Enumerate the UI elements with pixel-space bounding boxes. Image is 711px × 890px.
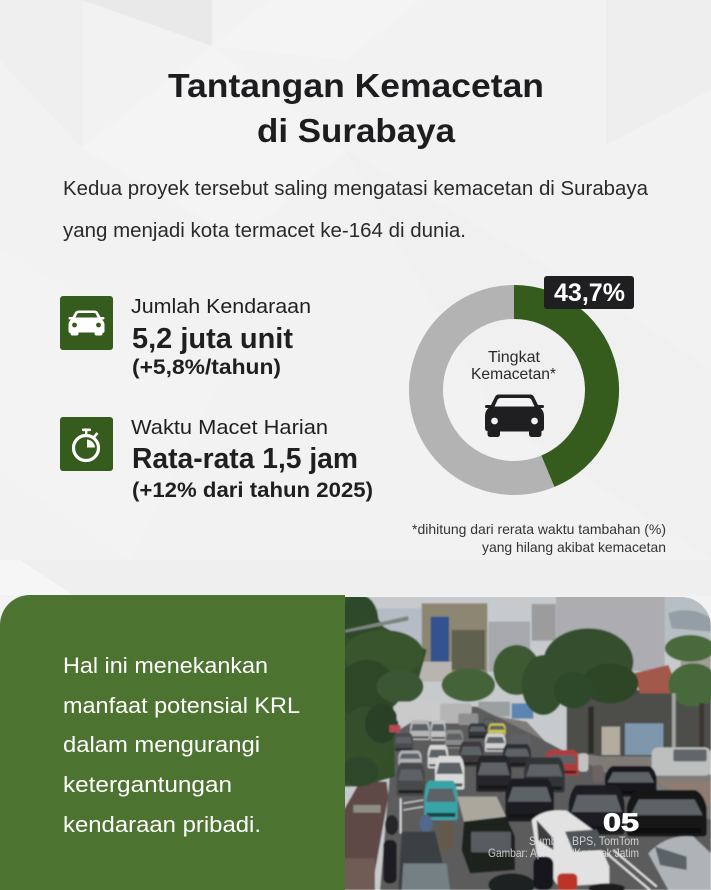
intro text: yang menjadi kota termacet ke-164 di dunia.	[63, 219, 466, 242]
motorcycles left	[385, 815, 398, 835]
icon: car on green tile	[60, 296, 113, 350]
intro text: Kedua proyek tersebut saling mengatasi kemacetan di Surabaya	[63, 177, 649, 200]
panel text: kendaraan pribadi.	[63, 812, 261, 837]
footnote: yang hilang akibat kemacetan	[482, 539, 666, 555]
distant trees	[665, 635, 711, 662]
footpath	[345, 780, 390, 871]
title	[168, 67, 544, 149]
vehicle count text: 5,2 juta unit	[132, 323, 294, 355]
title: di Surabaya	[257, 112, 456, 149]
traffic cars	[410, 720, 430, 740]
road markings	[398, 797, 403, 834]
percentage label: 43,7%	[554, 279, 625, 307]
panel: green message	[0, 595, 345, 890]
source credits: Gambar: Aprilia D./Kompak Jatim	[488, 846, 639, 860]
panel text: manfaat potensial KRL	[63, 693, 300, 718]
vehicle count text: (+5,8%/tahun)	[132, 356, 281, 379]
photo: traffic jam street in Surabaya	[337, 590, 711, 890]
donut centre label: Tingkat	[488, 349, 541, 366]
donut centre label: Kemacetan*	[471, 366, 556, 383]
percentage label	[544, 276, 634, 309]
distant cars	[397, 702, 443, 722]
page number: 05	[603, 809, 639, 837]
vehicle count text: Jumlah Kendaraan	[131, 296, 311, 318]
left tree	[340, 595, 427, 787]
panel text: Hal ini menekankan	[63, 653, 268, 678]
traffic time text: (+12% dari tahun 2025)	[132, 479, 373, 502]
icon: stopwatch on green tile	[60, 417, 113, 471]
foreground van	[398, 832, 448, 890]
sidewalk right	[496, 716, 711, 820]
right side buildings	[567, 690, 711, 757]
silver MPV	[648, 836, 711, 890]
larger cars	[605, 766, 657, 797]
truck	[457, 797, 506, 822]
traffic time text	[131, 417, 373, 502]
footnote	[412, 521, 666, 555]
traffic time text: Rata-rata 1,5 jam	[132, 443, 358, 475]
large trees	[544, 628, 634, 676]
donut chart	[426, 276, 634, 487]
intro text	[63, 177, 649, 242]
icon: car in donut	[485, 394, 544, 437]
buildings	[556, 595, 665, 671]
panel text: dalam mengurangi	[63, 732, 260, 757]
panel text	[63, 653, 300, 837]
title: Tantangan Kemacetan	[168, 67, 544, 104]
white SUV	[532, 810, 609, 887]
vehicle count text	[131, 296, 311, 379]
road	[380, 707, 711, 890]
bottom dark objects	[488, 873, 535, 890]
motorcycles mid	[578, 753, 588, 772]
donut centre label	[471, 349, 556, 383]
traffic time text: Waktu Macet Harian	[131, 417, 328, 439]
parked silver car	[652, 747, 711, 776]
source credits: Sumber: BPS, TomTom	[529, 834, 639, 848]
source credits	[488, 834, 639, 860]
panel text: ketergantungan	[63, 772, 232, 797]
footnote: *dihitung dari rerata waktu tambahan (%)	[412, 521, 666, 537]
